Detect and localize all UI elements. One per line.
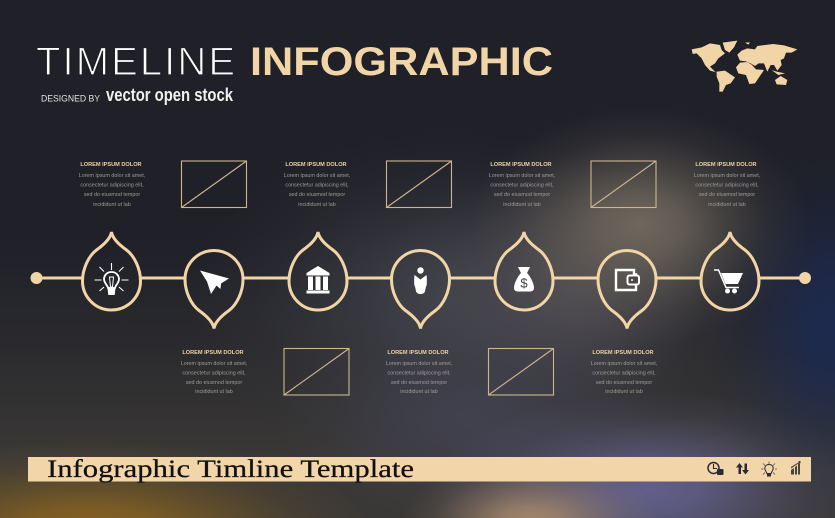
text block 5: Lorem ipsum dolor sit amet,: [489, 173, 556, 179]
marker 7: shopping cart: [701, 232, 759, 310]
text block 1: consectetur adipiscing elit,: [80, 182, 144, 188]
text block 1: sed do eiusmod tempor: [84, 192, 140, 198]
text block 3: Lorem ipsum dolor sit amet,: [284, 173, 351, 179]
text block 5: [489, 162, 556, 208]
text block 3: [284, 162, 351, 208]
text block 5: sed do eiusmod tempor: [494, 192, 550, 198]
banner title: Infographic Timline Template: [47, 456, 414, 483]
text block 6: incididunt ut lab: [605, 389, 643, 395]
byline: vector open stock: [106, 85, 234, 105]
text block 7: incididunt ut lab: [708, 202, 746, 208]
text block 4: incididunt ut lab: [400, 389, 438, 395]
image placeholder 2: [284, 348, 349, 395]
text block 4: sed do eiusmod tempor: [391, 380, 447, 386]
title: INFOGRAPHIC: [250, 40, 553, 84]
text block 6: consectetur adipiscing elit,: [592, 370, 656, 376]
byline: [41, 85, 234, 105]
text block 3: LOREM IPSUM DOLOR: [285, 162, 347, 168]
icon: shopping cart: [714, 270, 743, 294]
title: TIMELINE: [36, 40, 235, 84]
text block 1: [79, 162, 146, 208]
text block 1: LOREM IPSUM DOLOR: [80, 162, 142, 168]
icon: bank: [306, 266, 330, 294]
text block 1: Lorem ipsum dolor sit amet,: [79, 173, 146, 179]
text block 7: [694, 162, 761, 208]
marker 3: bank: [289, 232, 347, 310]
text block 3: consectetur adipiscing elit,: [285, 182, 349, 188]
icon: person: [414, 267, 427, 294]
text block 6: sed do eiusmod tempor: [596, 380, 652, 386]
text block 4: consectetur adipiscing elit,: [387, 370, 451, 376]
text block 2: LOREM IPSUM DOLOR: [182, 350, 244, 356]
text block 7: sed do eiusmod tempor: [699, 192, 755, 198]
icon: paper plane: [200, 270, 229, 294]
icon: clock: [708, 462, 724, 475]
title: [36, 40, 553, 84]
marker 2: paper plane: [185, 250, 243, 328]
marker 5: money bag: [495, 232, 553, 310]
text block 4: [386, 350, 453, 395]
image placeholder 4: [488, 348, 554, 395]
text block 2: incididunt ut lab: [195, 389, 233, 395]
text block 5: LOREM IPSUM DOLOR: [490, 162, 552, 168]
text block 2: [181, 350, 248, 395]
text block 4: Lorem ipsum dolor sit amet,: [386, 361, 453, 367]
text block 3: sed do eiusmod tempor: [289, 192, 345, 198]
icon: world map: [692, 41, 797, 92]
text block 4: LOREM IPSUM DOLOR: [387, 350, 449, 356]
text block 6: [591, 350, 658, 395]
text block 5: incididunt ut lab: [503, 202, 541, 208]
marker 4: person: [392, 250, 450, 328]
image placeholder 1: [182, 161, 246, 208]
timeline line: [30, 272, 811, 284]
banner: [28, 456, 811, 483]
marker 6: wallet: [598, 250, 656, 328]
text block 7: consectetur adipiscing elit,: [695, 182, 759, 188]
text block 7: LOREM IPSUM DOLOR: [695, 162, 757, 168]
image placeholder 3: [386, 161, 452, 208]
byline: DESIGNED BY: [41, 94, 101, 104]
text block 2: Lorem ipsum dolor sit amet,: [181, 361, 248, 367]
text block 6: Lorem ipsum dolor sit amet,: [591, 361, 658, 367]
icon: money bag: $: [520, 276, 528, 290]
text block 7: Lorem ipsum dolor sit amet,: [694, 173, 761, 179]
marker 1: light bulb: [82, 232, 140, 310]
text block 6: LOREM IPSUM DOLOR: [592, 350, 654, 356]
icon: light bulb: [94, 263, 128, 295]
text block 3: incididunt ut lab: [298, 202, 336, 208]
icon: up and down arrows: [736, 463, 749, 474]
image placeholder 5: [591, 161, 656, 208]
text block 2: consectetur adipiscing elit,: [182, 370, 246, 376]
text block 2: sed do eiusmod tempor: [186, 380, 242, 386]
text block 5: consectetur adipiscing elit,: [490, 182, 554, 188]
icon: wallet: [616, 270, 639, 290]
icon: bulb: [761, 462, 777, 476]
text block 1: incididunt ut lab: [93, 202, 131, 208]
icon: growth chart: [791, 461, 800, 474]
